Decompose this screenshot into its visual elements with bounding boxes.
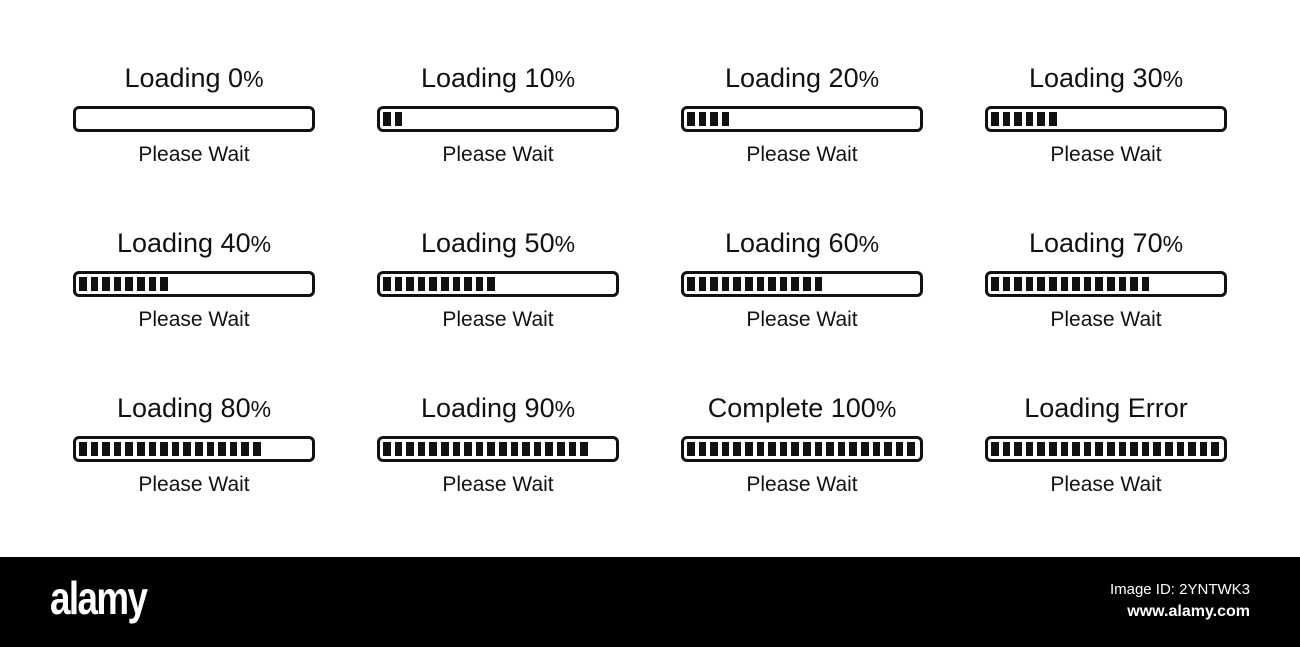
cell: loading 80: Loading 80% (117, 393, 271, 423)
cell: loading 30: Loading 30% (1029, 63, 1183, 93)
cell: loading 0: Please Wait (138, 143, 250, 166)
cell: loading 30: Please Wait (1050, 143, 1162, 166)
cell: loading 10: Please Wait (442, 143, 554, 166)
cell: loading 50: Please Wait (442, 308, 554, 331)
cell: loading 20: Loading 20% (725, 63, 879, 93)
cell: loading 10 (377, 63, 619, 166)
image id: Image ID: 2YNTWK3 (1110, 581, 1250, 598)
cell: loading error: Loading Error (1024, 393, 1188, 423)
cell: loading 10: Loading 10% (421, 63, 575, 93)
cell: complete 100: Complete 100% (708, 393, 896, 423)
cell: complete 100 (681, 393, 923, 496)
cell: loading 90 (377, 393, 619, 496)
cell: loading 80 (73, 393, 315, 496)
cell: loading 40: Please Wait (138, 308, 250, 331)
cell: loading 40 (73, 228, 315, 331)
logo: alamy (50, 572, 146, 624)
cell: loading 80: Please Wait (138, 473, 250, 496)
cell: loading 30 (985, 63, 1227, 166)
cell: loading 60: Loading 60% (725, 228, 879, 258)
cell: loading 0: Loading 0% (124, 63, 264, 93)
footer (0, 557, 1300, 647)
cell: loading error: Please Wait (1050, 473, 1162, 496)
image id: www.alamy.com (1127, 603, 1250, 620)
cell: loading 90: Please Wait (442, 473, 554, 496)
cell: loading 70 (985, 228, 1227, 331)
cell: loading error (985, 393, 1227, 496)
cell: complete 100: Please Wait (746, 473, 858, 496)
cell: loading 70: Loading 70% (1029, 228, 1183, 258)
cell: loading 60 (681, 228, 923, 331)
cell: loading 40: Loading 40% (117, 228, 271, 258)
cell: loading 90: Loading 90% (421, 393, 575, 423)
cell: loading 0 (73, 63, 315, 166)
cell: loading 50: Loading 50% (421, 228, 575, 258)
image id (1110, 581, 1250, 620)
cell: loading 60: Please Wait (746, 308, 858, 331)
cell: loading 20: Please Wait (746, 143, 858, 166)
cell: loading 50 (377, 228, 619, 331)
cell: loading 20 (681, 63, 923, 166)
cell: loading 70: Please Wait (1050, 308, 1162, 331)
